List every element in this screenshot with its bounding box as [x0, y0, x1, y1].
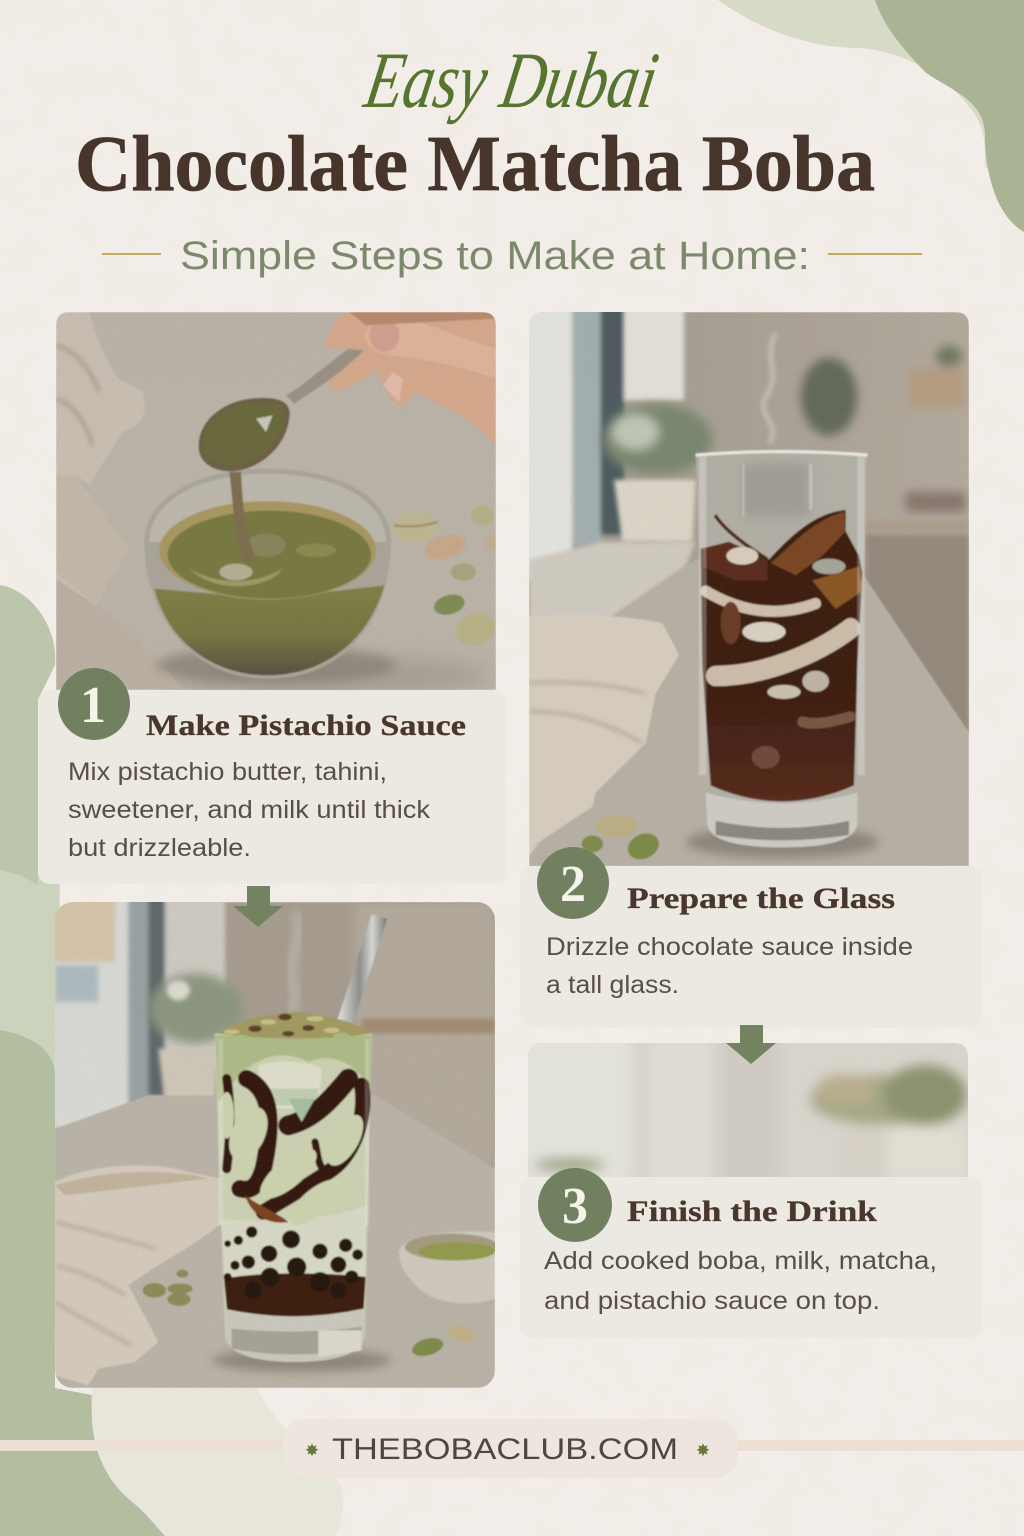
sauce surface [159, 501, 376, 600]
hand [324, 312, 496, 445]
counter [55, 1095, 495, 1388]
decorative blob: bottom pale shape [92, 1388, 343, 1536]
arrow: step 1 to step 3 photo [233, 886, 283, 927]
small matcha bowl [399, 1231, 495, 1303]
step 3 heading: Finish the Drink [627, 1195, 877, 1228]
glass highlights [699, 457, 865, 775]
glass shadow [212, 1349, 392, 1372]
glass shadow [686, 826, 879, 858]
linen [55, 1165, 223, 1385]
pale marbled cells [219, 1092, 371, 1232]
footer website pill: ✸ [696, 1441, 710, 1461]
script heading: Easy Dubai [358, 37, 664, 125]
dark base [224, 1273, 366, 1316]
steam [763, 333, 776, 443]
pistachios [393, 505, 500, 651]
window and frame [522, 305, 684, 581]
drip [229, 472, 258, 562]
plant and pot [602, 346, 966, 512]
shadow [156, 647, 396, 684]
arrow: step 2 to step 3 [726, 1025, 776, 1064]
photo: pistachio sauce in bowl [56, 312, 500, 695]
glass [695, 454, 867, 574]
pistachio topping [218, 1012, 372, 1039]
step 3 description: Add cooked boba, milk, matcha, [544, 1247, 937, 1275]
photo: glass with chocolate drizzle [522, 305, 969, 866]
step 1 description [68, 758, 431, 862]
pale swirl bands [706, 591, 851, 723]
spoon bowl [199, 398, 290, 471]
step 2 description: a tall glass. [546, 971, 679, 999]
glass rim highlight [218, 1039, 369, 1225]
step 2 description: Drizzle chocolate sauce inside [546, 933, 913, 961]
linen [56, 312, 145, 605]
sauce body [154, 585, 384, 675]
step 1 description: sweetener, and milk until thick [68, 796, 431, 824]
step 2 description [546, 933, 913, 999]
scattered pistachios [143, 1270, 193, 1306]
footer website pill: ✸ [305, 1441, 319, 1461]
pistachios [595, 815, 638, 838]
chocolate drizzles [227, 1079, 363, 1212]
step 3 description: and pistachio sauce on top. [544, 1287, 880, 1315]
step 2 number badge: 2 [560, 856, 586, 913]
spoon handle [286, 348, 364, 404]
main heading: Chocolate Matcha Boba [75, 121, 875, 208]
sill [529, 542, 696, 619]
footer band [0, 1440, 1024, 1451]
step 3 number badge [538, 1168, 612, 1242]
step 1 card [38, 668, 506, 884]
step 1 heading: Make Pistachio Sauce [146, 709, 466, 742]
clear base [225, 1309, 365, 1362]
step 2 number badge [537, 847, 609, 919]
glass body [215, 1034, 372, 1362]
base glass [706, 793, 857, 847]
bowl back glass [144, 469, 391, 679]
step 2 heading: Prepare the Glass [627, 882, 895, 915]
straw [337, 915, 387, 1024]
green top [216, 1035, 371, 1102]
steam [291, 912, 299, 1015]
step 1 number badge [58, 668, 130, 740]
photo: finished boba drink [48, 895, 498, 1388]
step 1 description: Mix pistachio butter, tahini, [68, 758, 387, 786]
step 1 description: but drizzleable. [68, 834, 251, 862]
decorative blob: top right [718, 0, 1024, 232]
step 3 number badge: 3 [562, 1178, 588, 1235]
step 1 number badge: 1 [80, 677, 106, 734]
shelf and cabinet [866, 521, 969, 532]
footer website pill [283, 1419, 738, 1478]
linen [529, 615, 679, 856]
boba pearls [224, 1226, 363, 1299]
counter [529, 559, 969, 866]
ice lumps [726, 547, 758, 565]
plant, pot, shelf [148, 974, 242, 1044]
photo: blurred windowsill strip [520, 1035, 968, 1185]
decorative blob: left side [0, 585, 165, 1536]
step 3 card [520, 1168, 982, 1338]
footer website pill: THEBOBACLUB.COM [332, 1433, 678, 1466]
step 2 card [520, 847, 982, 1028]
top drizzle [715, 515, 767, 559]
chocolate mass [701, 510, 862, 801]
window [48, 895, 225, 1129]
subtitle: Simple Steps to Make at Home: [180, 234, 810, 278]
milk boba zone [221, 1205, 367, 1282]
step 3 description [544, 1247, 937, 1315]
